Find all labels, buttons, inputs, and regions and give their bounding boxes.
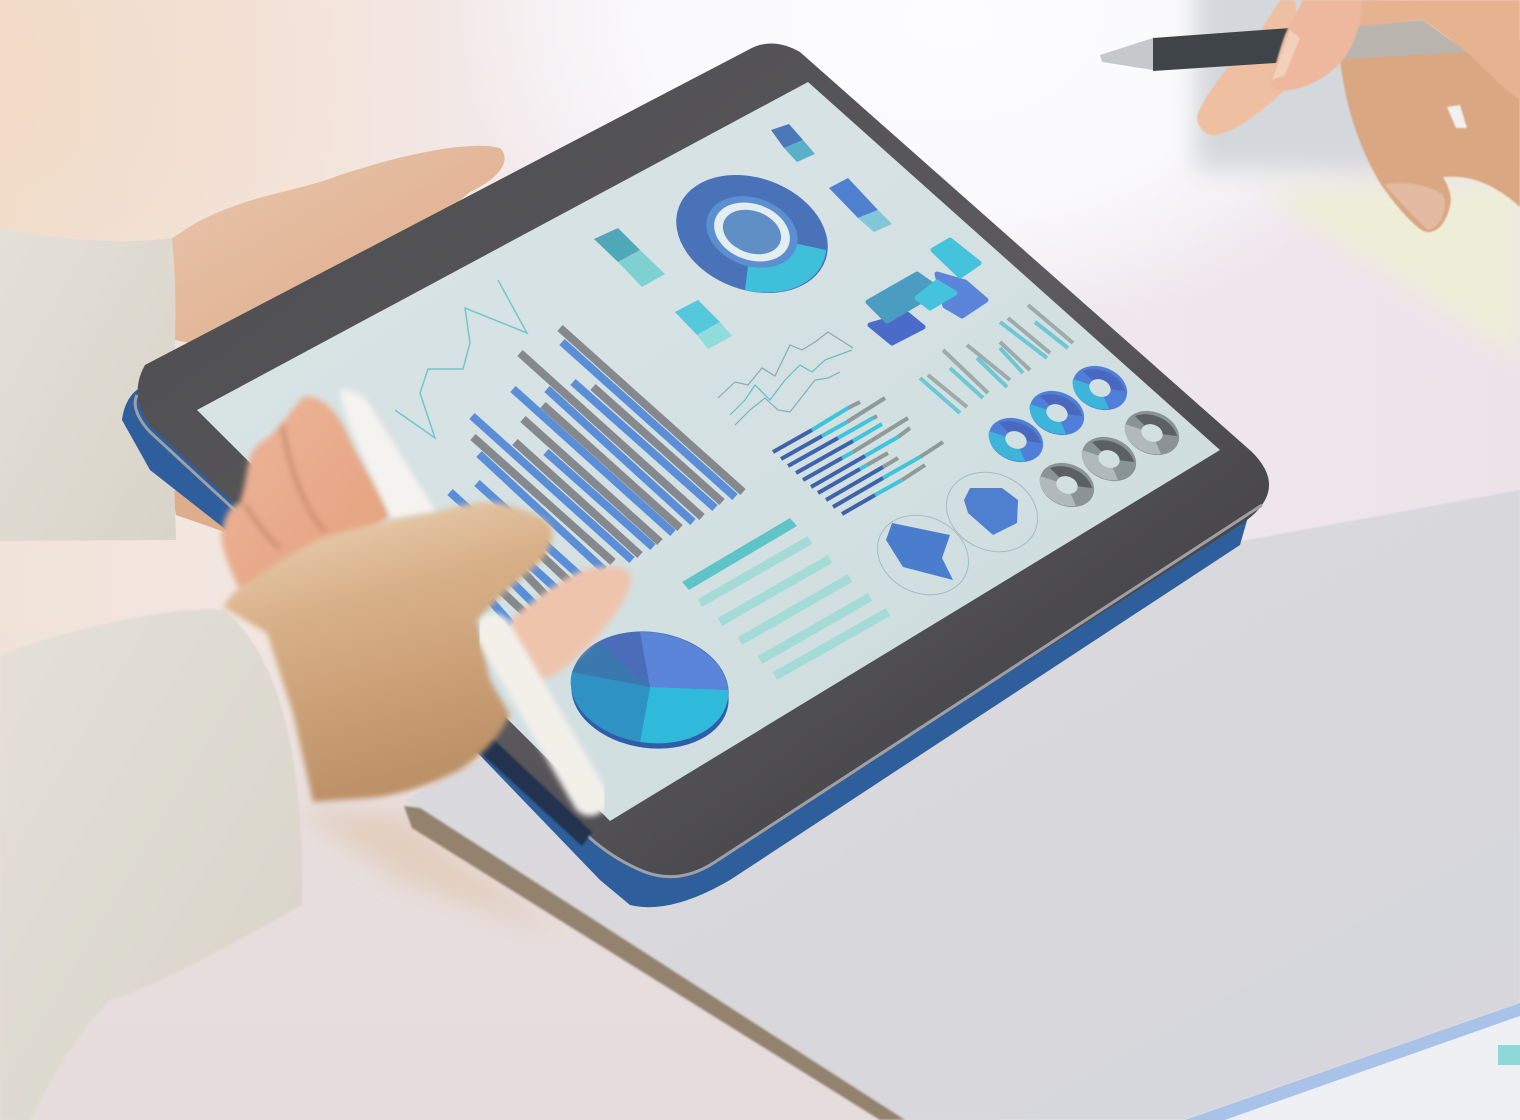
tablet screen	[197, 82, 1220, 821]
horizontal bars chart	[773, 398, 943, 514]
hand: foreground thumb	[510, 567, 631, 690]
stylus upper	[340, 390, 436, 520]
hand: right top, index finger and knuckles	[1271, 0, 1520, 128]
line chart	[395, 280, 527, 438]
sleeve: foreground arm	[0, 609, 302, 1120]
tablet body	[138, 43, 1269, 875]
donut KPI	[660, 155, 844, 313]
tablet dark side with speaker	[472, 738, 592, 846]
hand: right top, rear fingers	[1197, 0, 1520, 232]
flow blocks	[868, 240, 986, 343]
tablet metal edge	[135, 395, 1262, 877]
dashboard charts	[395, 124, 1186, 758]
tablet case	[122, 385, 1250, 907]
radar charts	[864, 458, 1051, 609]
hand: foreground fingers	[221, 397, 390, 590]
bar chart	[450, 328, 743, 625]
donut grid	[982, 358, 1186, 515]
sleeve: upper left arm	[0, 228, 176, 541]
stylus lower	[494, 632, 590, 798]
pie chart	[564, 622, 736, 758]
folder on the desk	[404, 490, 1520, 1120]
area line chart	[718, 332, 853, 425]
data table	[682, 518, 888, 676]
hand: foreground palm	[223, 502, 552, 802]
top small bars	[594, 124, 892, 349]
pen	[1100, 20, 1467, 71]
hand: rear left holding tablet	[170, 146, 505, 532]
small bars upper right	[920, 305, 1073, 413]
